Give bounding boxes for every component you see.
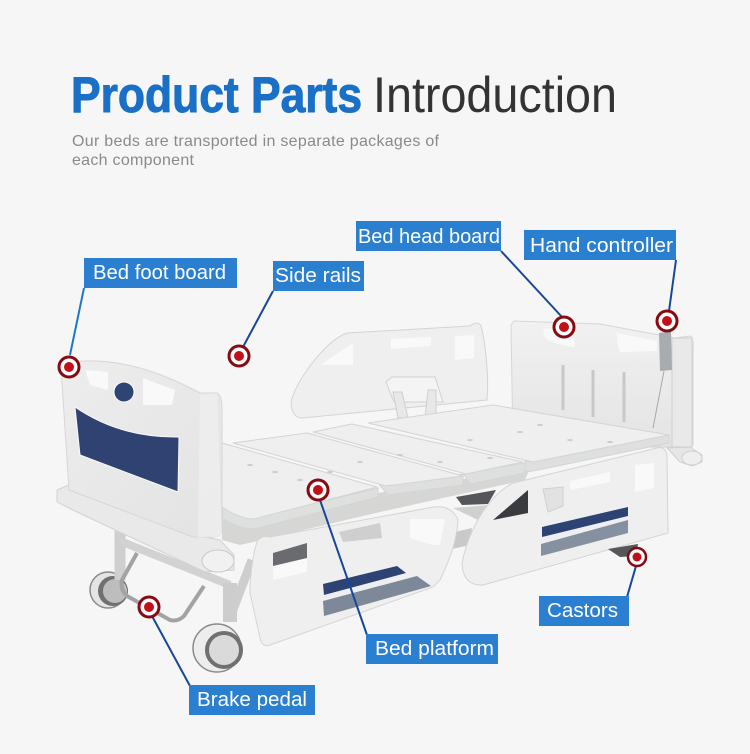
callout: Bed platform: Bed platform xyxy=(375,638,494,660)
callout: Side rails xyxy=(229,261,364,366)
far wheel xyxy=(90,572,128,608)
title: Product Parts xyxy=(71,67,362,123)
callout: Brake pedal xyxy=(139,597,315,715)
under frame xyxy=(222,468,530,556)
callout: Bed platform xyxy=(308,480,498,664)
callout: Castors: Castors xyxy=(547,600,618,622)
callout: Bed head board xyxy=(356,221,574,337)
far side rail xyxy=(291,323,488,418)
subtitle text: each component xyxy=(72,152,195,169)
callout: Hand controller xyxy=(524,230,677,331)
callout: Bed foot board xyxy=(59,258,237,377)
hand controller xyxy=(653,331,672,428)
callout: Bed foot board: Bed foot board xyxy=(93,262,226,284)
near side rail at head xyxy=(462,448,668,585)
callout: Hand controller: Hand controller xyxy=(530,235,673,257)
far castor xyxy=(608,544,638,557)
foot board xyxy=(57,361,234,572)
title xyxy=(71,67,617,123)
bed platform xyxy=(222,405,669,529)
subtitle text xyxy=(72,133,440,169)
subtitle text: Our beds are transported in separate packages of xyxy=(72,133,440,150)
brake pedal xyxy=(122,553,204,620)
near wheel xyxy=(193,624,241,672)
far head board xyxy=(511,321,702,466)
title: Introduction xyxy=(373,67,617,123)
callout: Side rails: Side rails xyxy=(275,265,361,287)
callout: Castors xyxy=(539,548,646,626)
callout: Bed head board: Bed head board xyxy=(358,226,500,248)
near side rail at foot xyxy=(250,507,458,646)
legs and frame xyxy=(120,530,252,622)
callout: Brake pedal: Brake pedal xyxy=(197,689,307,711)
hospital bed illustration xyxy=(57,321,702,672)
